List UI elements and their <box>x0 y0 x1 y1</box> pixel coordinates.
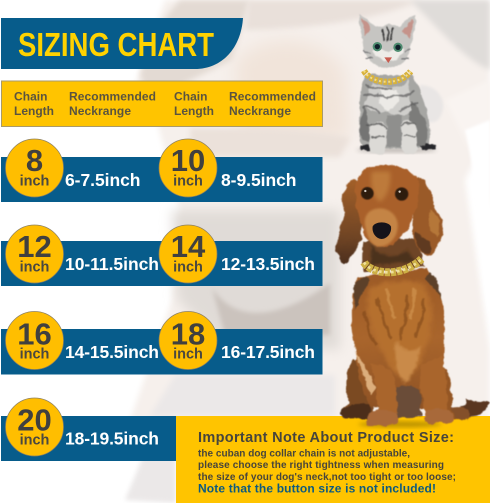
badge: 12 inch: 12 <box>17 229 52 264</box>
gold collar <box>364 71 411 82</box>
badge: 20 inch <box>6 398 64 456</box>
range: 10-11.5inch: 10-11.5inch <box>65 254 159 274</box>
note heading: Important Note About Product Size: <box>198 430 454 446</box>
column heading: chain length 1: Length <box>14 104 54 118</box>
dog right ear <box>413 178 443 256</box>
badge: 20 inch: inch <box>20 432 49 448</box>
row 4: 20 inch <box>1 398 176 461</box>
note body: please choose the right tightness when measuring <box>198 460 444 471</box>
dog head <box>355 165 420 247</box>
rear paw right <box>450 407 471 420</box>
badge: 14 inch: inch <box>173 260 203 276</box>
badge: 16 inch: inch <box>20 346 49 362</box>
dog belly shadow <box>394 385 422 417</box>
column heading: neckrange 2: Recommended <box>229 90 316 104</box>
dog nose <box>373 222 391 239</box>
badge: 18 inch <box>159 312 217 370</box>
column heading: chain length 2: Chain <box>174 90 208 104</box>
badge: 8 inch: inch <box>20 174 49 190</box>
badge: 16 inch <box>6 312 64 370</box>
column heading: neckrange 1: Neckrange <box>69 104 131 118</box>
dog eyes <box>361 187 374 200</box>
badge: 18 inch: inch <box>173 346 203 362</box>
title text: SIZING CHART <box>18 26 214 63</box>
badge: 18 inch: 18 <box>171 316 205 352</box>
cat eyes <box>373 42 382 51</box>
column heading: chain length 2: Length <box>174 104 214 118</box>
badge: 10 inch <box>159 139 217 197</box>
dog rear leg right <box>433 355 470 420</box>
note body: the size of your dog's neck,not too tight or too loose; <box>198 472 456 483</box>
dog front paws <box>367 410 399 426</box>
badge: 12 inch: inch <box>20 260 49 276</box>
photo: long-haired dachshund wearing gold chain <box>337 165 489 427</box>
range: 14-15.5inch: 14-15.5inch <box>65 342 159 362</box>
title banner <box>1 18 243 69</box>
column heading: chain length 1: Chain <box>14 90 48 104</box>
dog torso <box>352 268 445 408</box>
range: 8-9.5inch: 8-9.5inch <box>221 170 296 190</box>
badge: 20 inch: 20 <box>17 402 52 438</box>
important note panel <box>176 416 490 503</box>
dog tail <box>460 398 489 417</box>
cat front legs <box>369 122 387 155</box>
row 3: 16 and 18 inch <box>1 312 322 374</box>
badge: 16 inch: 16 <box>17 316 52 352</box>
range: 6-7.5inch: 6-7.5inch <box>65 170 140 190</box>
badge: 8 inch: 8 <box>26 143 43 178</box>
range: 16-17.5inch: 16-17.5inch <box>221 342 315 362</box>
badge: 14 inch: 14 <box>171 229 206 264</box>
photo: tabby cat wearing gold chain <box>357 14 437 155</box>
badge: 12 inch <box>6 225 64 283</box>
table header band <box>2 81 322 126</box>
badge: 14 inch <box>159 225 217 283</box>
range: 18-19.5inch: 18-19.5inch <box>65 428 159 448</box>
range: 12-13.5inch: 12-13.5inch <box>221 254 315 274</box>
dog rear leg left <box>341 358 373 419</box>
dog front legs <box>370 362 398 413</box>
row 2: 12 and 14 inch <box>1 225 322 286</box>
note body: the cuban dog collar chain is not adjustable, <box>198 448 410 460</box>
badge: 10 inch: inch <box>173 174 203 190</box>
gold chain collar <box>364 259 422 272</box>
badge: 10 inch: 10 <box>171 143 205 178</box>
dog chest highlights <box>367 281 432 377</box>
cat nose <box>384 57 392 63</box>
note emphasis line: Note that the button size is not included! <box>198 482 436 496</box>
cat haunches and back <box>359 75 429 148</box>
badge: 8 inch <box>6 139 64 197</box>
column heading: neckrange 1: Recommended <box>69 90 156 104</box>
row 1: 8 and 10 inch <box>1 139 322 202</box>
cat chest <box>365 80 412 115</box>
dog left ear <box>337 178 363 263</box>
column heading: neckrange 2: Neckrange <box>229 104 291 118</box>
cat head <box>360 14 415 68</box>
dog neck <box>362 238 425 272</box>
